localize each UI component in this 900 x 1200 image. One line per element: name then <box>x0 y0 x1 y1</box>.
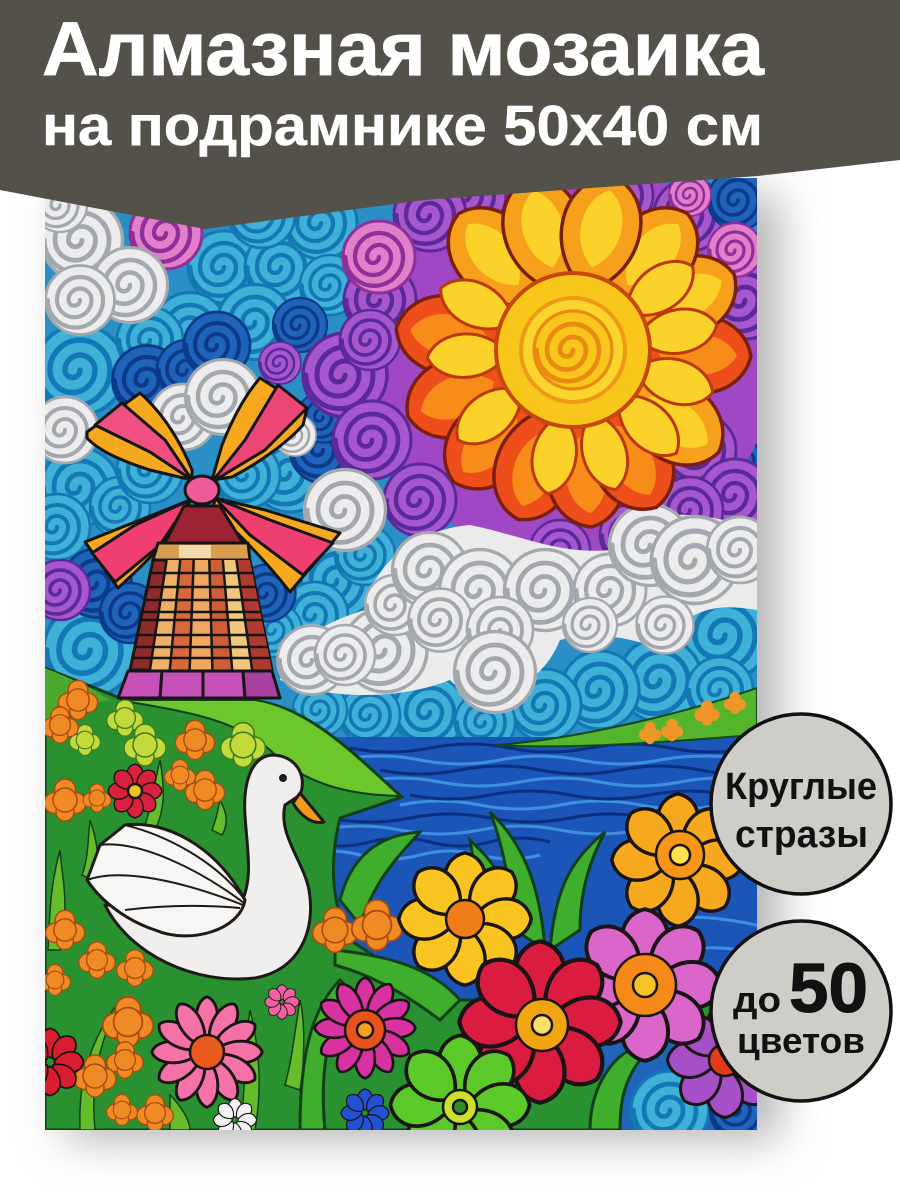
badge: round rhinestones <box>711 714 891 894</box>
swan <box>87 755 324 979</box>
flower: orange <box>612 794 744 926</box>
green meadow <box>45 668 770 1149</box>
purple mass behind sun <box>380 182 757 551</box>
windmill cap <box>165 506 243 543</box>
windmill band <box>153 543 250 560</box>
meadow bushes <box>40 680 402 1131</box>
windmill blades <box>85 378 340 592</box>
canvas drop shadow <box>65 195 780 1140</box>
header banner <box>0 0 900 229</box>
subtitle: на подрамнике 50х40 см <box>42 94 763 158</box>
title: Алмазная мозаика <box>42 7 765 92</box>
flower: red <box>459 941 621 1103</box>
flower: green <box>388 1034 532 1130</box>
water <box>335 737 757 998</box>
swan wing <box>87 824 245 936</box>
flower: pink <box>569 909 721 1061</box>
flower: magenta <box>315 978 415 1078</box>
flower: small pink <box>265 985 299 1019</box>
white cloud base <box>280 515 757 696</box>
swan body and neck <box>105 755 311 979</box>
painting on canvas <box>45 178 757 1130</box>
flowers <box>45 763 757 1130</box>
windmill base <box>118 671 280 698</box>
flower: light pink <box>152 997 262 1107</box>
badge: up to 50 colours: цветов <box>737 1020 865 1061</box>
badge: up to 50 colours: 50 <box>789 949 868 1027</box>
swan eye <box>280 776 286 780</box>
flower: small white <box>212 1098 258 1130</box>
windmill <box>85 378 340 698</box>
deep blue corner swirl <box>708 178 757 228</box>
sky swirls <box>24 159 784 752</box>
far shore with flowers <box>495 688 757 746</box>
badge: up to 50 colours: до <box>733 979 781 1020</box>
sun <box>392 168 752 531</box>
flower: poppy <box>108 764 162 818</box>
flower: yellow <box>399 853 531 985</box>
swan beak <box>293 793 324 823</box>
flower: left red <box>45 1028 84 1096</box>
windmill brick tower <box>120 560 280 670</box>
badge: round rhinestones: стразы <box>735 814 868 856</box>
flower: small blue <box>341 1089 389 1137</box>
badge: round rhinestones: Круглые <box>725 766 877 808</box>
flower: purple <box>666 1012 757 1120</box>
badge: up to 50 colours <box>711 921 891 1101</box>
windmill hub <box>185 476 219 504</box>
